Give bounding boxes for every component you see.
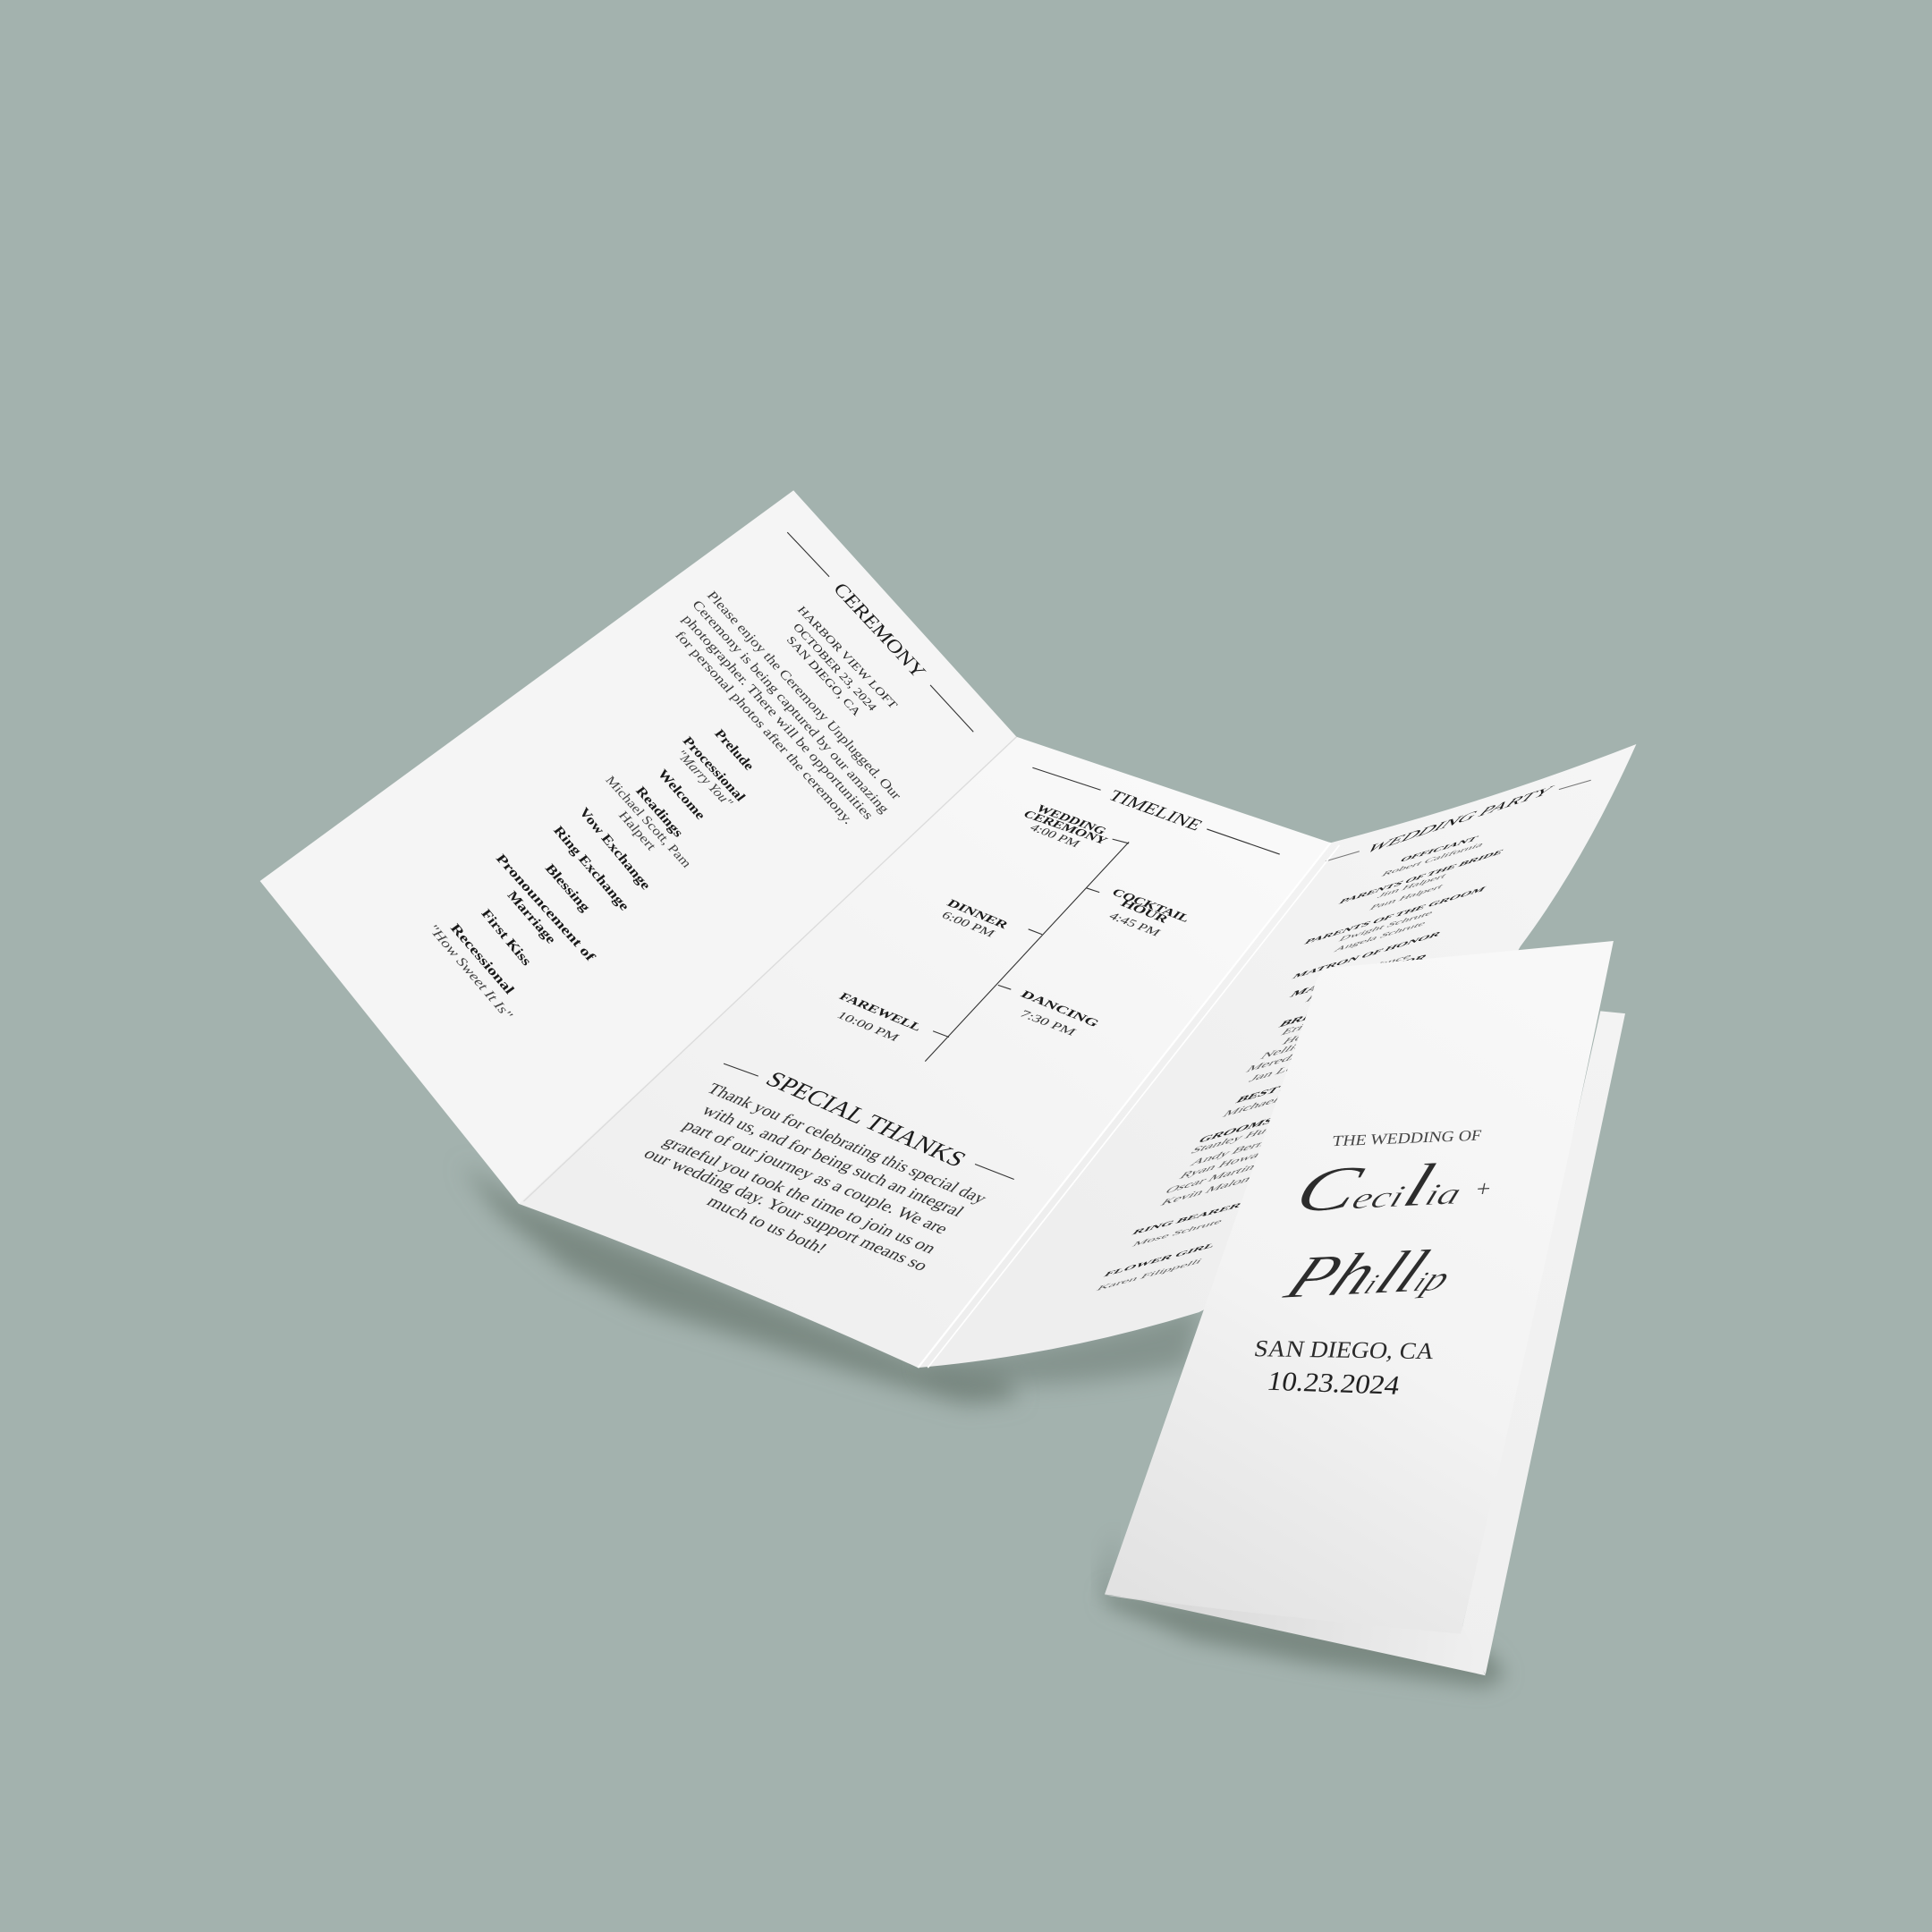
timeline chart: HOUR xyxy=(1117,898,1172,926)
order of service: Processional xyxy=(680,734,748,804)
order of service xyxy=(425,727,757,1022)
timeline chart: 4:00 PM xyxy=(1027,822,1082,850)
order of service: Halpert xyxy=(615,809,659,853)
order of service: Vow Exchange xyxy=(576,805,653,893)
closed program cover xyxy=(1104,941,1625,1675)
panel: ceremony xyxy=(260,490,1016,1204)
unplugged note: photographer. There will be opportunities xyxy=(679,613,876,822)
order of service: First Kiss xyxy=(479,907,534,969)
thank you message: part of our journey as a couple. We are xyxy=(679,1117,952,1237)
wedding party names: Angela Schrute xyxy=(1332,919,1429,953)
wedding party names: Andy Bernard xyxy=(1188,1131,1292,1168)
wedding party names xyxy=(1094,834,1506,1292)
timeline chart: WEDDING xyxy=(1033,803,1109,837)
wedding party names: Stanley Hudson xyxy=(1188,1115,1303,1157)
order of service: "Marry You" xyxy=(673,748,735,809)
order of service: Marriage xyxy=(504,889,558,946)
wedding party names: MATRON OF HONOR xyxy=(1290,929,1445,980)
wedding party names: MAID OF HONOR xyxy=(1287,952,1431,1000)
ceremony sheet xyxy=(260,490,1016,1204)
heading: ceremony: CEREMONY xyxy=(828,580,930,682)
wedding party names: Mose Schrute xyxy=(1130,1216,1225,1249)
timeline chart: 6:00 PM xyxy=(938,910,997,940)
order of service: Ring Exchange xyxy=(550,824,631,913)
timeline chart: DINNER xyxy=(944,898,1012,932)
thank you message: much to us both! xyxy=(703,1193,831,1257)
timeline chart: 7:30 PM xyxy=(1017,1009,1078,1038)
order of service: Prelude xyxy=(711,727,757,773)
wedding party names: Jan Levinson xyxy=(1246,1049,1344,1084)
wedding party names: Meredith Palmer xyxy=(1243,1032,1365,1075)
thank you message: Thank you for celebrating this special day xyxy=(703,1080,991,1208)
order of service: Welcome xyxy=(655,767,708,822)
heading: timeline: TIMELINE xyxy=(1104,786,1208,834)
order of service: Recessional xyxy=(447,921,517,997)
wedding party names: Michael Scott xyxy=(1220,1083,1322,1120)
unplugged note: Please enjoy the Ceremony Unplugged. Our xyxy=(704,589,904,802)
wedding party names: Kelly Kapoor xyxy=(1302,969,1403,1004)
cover place and date: SAN DIEGO, CA xyxy=(1252,1335,1437,1364)
wedding party names: Dwight Schrute xyxy=(1336,909,1436,944)
thank you message: our wedding day. Your support means so xyxy=(640,1146,932,1275)
wedding party names: Karen Filippelli xyxy=(1094,1257,1206,1292)
timeline chart: 4:45 PM xyxy=(1106,911,1163,939)
back leaf xyxy=(1461,1011,1625,1674)
wedding party names: Nellie Bertram xyxy=(1258,1023,1366,1062)
wedding party names: OFFICIANT xyxy=(1398,834,1481,864)
venue details: OCTOBER 23, 2024 xyxy=(791,621,879,713)
back leaf bottom sliver xyxy=(1104,1595,1486,1675)
order of service: Blessing xyxy=(542,862,592,914)
wedding party names: FLOWER GIRL xyxy=(1101,1241,1218,1278)
cover names: + xyxy=(1474,1175,1493,1202)
wedding party names: BRIDESMAIDS xyxy=(1276,987,1398,1030)
shadow: closed program xyxy=(1097,1528,1505,1688)
heading: wedding party: WEDDING PARTY xyxy=(1361,782,1559,858)
unplugged note: for personal photos after the ceremony. xyxy=(672,629,856,826)
cover names: Cecilia xyxy=(1286,1148,1477,1226)
wedding party names: BEST MAN xyxy=(1233,1072,1326,1106)
thank you message xyxy=(640,1080,991,1275)
wedding party names: Kevin Malone xyxy=(1157,1171,1262,1208)
centre sheet xyxy=(519,737,1331,1368)
heading: ceremony xyxy=(787,532,973,732)
timeline chart: FAREWELL xyxy=(836,991,924,1034)
wedding party sheet xyxy=(918,744,1636,1368)
wedding party names: Phyllis Vance xyxy=(1316,952,1415,986)
wedding party names: Jim Halpert xyxy=(1375,871,1450,900)
heading: timeline xyxy=(1032,767,1280,854)
timeline chart xyxy=(834,803,1192,1062)
timeline chart: DANCING xyxy=(1018,989,1102,1030)
cover text: the wedding of: THE WEDDING OF xyxy=(1331,1126,1483,1149)
order of service: "How Sweet It Is" xyxy=(425,922,515,1022)
wedding party names: Ryan Howard xyxy=(1176,1145,1278,1182)
cover names: Phillip xyxy=(1274,1236,1470,1312)
wedding party names: Oscar Martinez xyxy=(1162,1157,1275,1196)
order of service: Michael Scott, Pam xyxy=(602,774,694,870)
timeline chart: 10:00 PM xyxy=(834,1010,902,1044)
shadow: open program xyxy=(462,1165,1201,1404)
timeline chart: COCKTAIL xyxy=(1109,887,1192,925)
front leaf xyxy=(1105,941,1614,1634)
wedding party names: Pam Halpert xyxy=(1368,882,1446,912)
venue details: HARBOR VIEW LOFT xyxy=(795,604,901,711)
wedding party names: Erin Hannon xyxy=(1278,1003,1373,1038)
thank you message: grateful you took the time to join us on xyxy=(659,1134,940,1257)
wedding party names: Holly Flax xyxy=(1279,1016,1360,1047)
heading: wedding party xyxy=(1326,780,1591,861)
wedding party names: PARENTS OF THE BRIDE xyxy=(1336,847,1506,906)
wedding party names: PARENTS OF THE GROOM xyxy=(1302,885,1488,946)
cover names xyxy=(1274,1148,1493,1312)
order of service: Readings xyxy=(632,784,686,840)
fold lines xyxy=(523,737,1339,1368)
heading: special thanks: SPECIAL THANKS xyxy=(760,1067,971,1172)
cover place and date: 10.23.2024 xyxy=(1265,1366,1402,1401)
timeline chart: CEREMONY xyxy=(1020,809,1110,847)
thank you message: with us, and for being such an integral xyxy=(698,1102,968,1220)
wedding party names: RING BEARER xyxy=(1130,1200,1245,1237)
panel: wedding party xyxy=(918,744,1636,1368)
unplugged note: Ceremony is being captured by our amazing xyxy=(689,598,892,816)
wedding party names: Robert California xyxy=(1379,840,1487,878)
cover place and date xyxy=(1252,1335,1437,1401)
order of service: Pronouncement of xyxy=(493,852,598,964)
panel: timeline and special thanks xyxy=(519,737,1339,1368)
wedding party names: GROOMSMEN xyxy=(1195,1104,1315,1146)
venue details: SAN DIEGO, CA xyxy=(784,634,864,718)
